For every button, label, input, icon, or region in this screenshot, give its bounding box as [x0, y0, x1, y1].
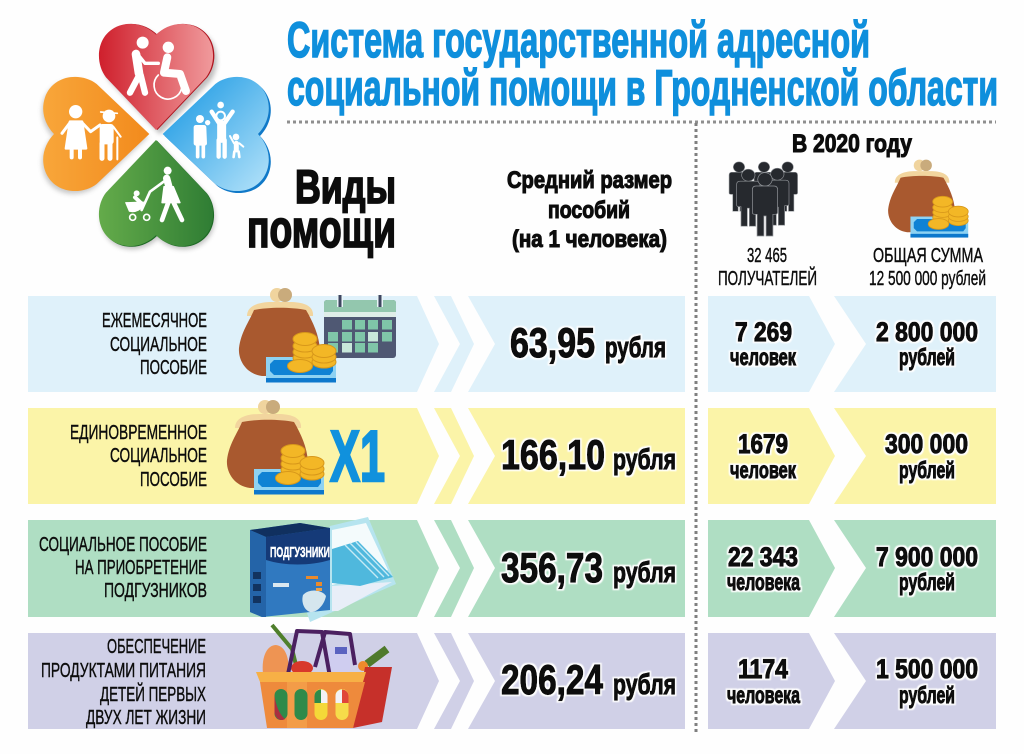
icon: purse with coins	[239, 288, 336, 382]
label: row 1: ЕЖЕМЕСЯЧНОЕ	[102, 310, 207, 332]
heart: orange, elderly couple	[42, 77, 149, 194]
value: sum: 300 000	[885, 429, 968, 459]
value: sum: рублей	[899, 457, 955, 483]
value: average benefit: 356,73	[501, 544, 603, 591]
value: sum	[885, 429, 968, 483]
value: average benefit: 206,24	[501, 656, 604, 703]
value: recipients	[730, 317, 796, 370]
recipients total: ПОЛУЧАТЕЛЕЙ	[718, 266, 817, 290]
label: row 3	[39, 534, 207, 602]
icon: diaper pack and pads: ПОДГУЗНИКИ	[270, 544, 330, 561]
label: row 2: ПОСОБИЕ	[140, 469, 207, 491]
row 1: monthly social benefit	[28, 288, 996, 392]
label: row 3: СОЦИАЛЬНОЕ ПОСОБИЕ	[39, 534, 207, 556]
value: average benefit: 63,95	[510, 319, 595, 366]
heading: in 2020: В 2020 году	[792, 130, 912, 158]
heading: types of assistance	[247, 160, 396, 259]
value: average benefit: рубля	[613, 444, 676, 476]
value: recipients: человека	[727, 569, 800, 595]
value: sum: 7 900 000	[876, 542, 978, 572]
icon: purse with coins	[227, 400, 324, 494]
arrow band: row 4	[28, 633, 996, 729]
value: average benefit: рубля	[605, 332, 666, 364]
label: row 2: СОЦИАЛЬНОЕ	[110, 445, 207, 467]
value: recipients: человек	[730, 457, 796, 483]
icon: diaper pack and pads	[250, 517, 396, 622]
row 3: diapers benefit	[28, 517, 996, 622]
label: row 1: ПОСОБИЕ	[140, 357, 207, 379]
value: sum	[876, 317, 978, 370]
icon: shopping basket	[256, 625, 392, 728]
heading: types of assistance: помощи	[247, 200, 396, 259]
value: sum: рублей	[899, 569, 955, 595]
value: recipients	[730, 429, 796, 483]
value: recipients: 1174	[738, 654, 788, 684]
icon: header purse	[888, 160, 968, 238]
arrow band: row 3	[28, 520, 996, 617]
value: sum: 2 800 000	[876, 317, 978, 347]
value: average benefit: 166,10	[501, 431, 605, 478]
label: row 4: ПРОДУКТАМИ ПИТАНИЯ	[41, 660, 206, 682]
heading: average benefit size	[507, 167, 672, 253]
icon: X1: X1	[330, 417, 385, 497]
heading: types of assistance: Виды	[295, 160, 396, 213]
value: recipients: 7 269	[735, 317, 792, 347]
value: average benefit: рубля	[613, 669, 676, 701]
label: row 2	[70, 422, 207, 491]
recipients total	[718, 245, 817, 290]
arrow band: row 2	[28, 408, 996, 504]
value: average benefit	[510, 319, 666, 366]
value: recipients: человек	[730, 344, 796, 370]
value: sum: 1 500 000	[876, 654, 978, 684]
value: average benefit: рубля	[613, 557, 676, 589]
value: sum: рублей	[899, 344, 955, 370]
heart: blue, family with children	[163, 77, 271, 193]
arrow band: row 1	[28, 296, 996, 392]
heart: red, carer and wheelchair user	[99, 24, 217, 134]
label: row 4: ДЕТЕЙ ПЕРВЫХ	[100, 682, 206, 706]
value: recipients	[727, 542, 800, 595]
label: row 2: ЕДИНОВРЕМЕННОЕ	[70, 422, 207, 444]
label: row 3: ПОДГУЗНИКОВ	[104, 580, 207, 602]
row 2: one-time social benefit	[28, 400, 996, 504]
value: recipients: 22 343	[728, 542, 798, 572]
label: row 4	[41, 636, 206, 729]
value: sum	[876, 654, 978, 708]
heading: average benefit size: (на 1 человека)	[512, 226, 667, 253]
value: recipients: 1679	[738, 429, 788, 459]
heart: green, mother with stroller	[99, 140, 215, 249]
row 4: food for young children	[28, 625, 996, 729]
value: sum	[876, 542, 978, 595]
icon: group of people	[729, 162, 798, 236]
value: recipients: человека	[727, 682, 800, 708]
heading: average benefit size: Средний размер	[507, 167, 672, 194]
value: recipients	[727, 654, 800, 708]
recipients total: 32 465	[747, 245, 787, 267]
total sum: ОБЩАЯ СУММА	[873, 245, 983, 267]
label: row 1: СОЦИАЛЬНОЕ	[110, 334, 207, 356]
title	[287, 12, 998, 116]
label: row 1	[102, 310, 207, 379]
logo: four-heart clover	[42, 24, 271, 249]
label: row 3: НА ПРИОБРЕТЕНИЕ	[75, 557, 207, 579]
value: sum: рублей	[899, 682, 955, 708]
total sum	[869, 245, 986, 290]
label: row 4: ОБЕСПЕЧЕНИЕ	[107, 636, 206, 658]
label: row 4: ДВУХ ЛЕТ ЖИЗНИ	[86, 707, 206, 729]
icon: calendar	[324, 295, 396, 358]
heading: average benefit size: пособий	[548, 197, 630, 224]
